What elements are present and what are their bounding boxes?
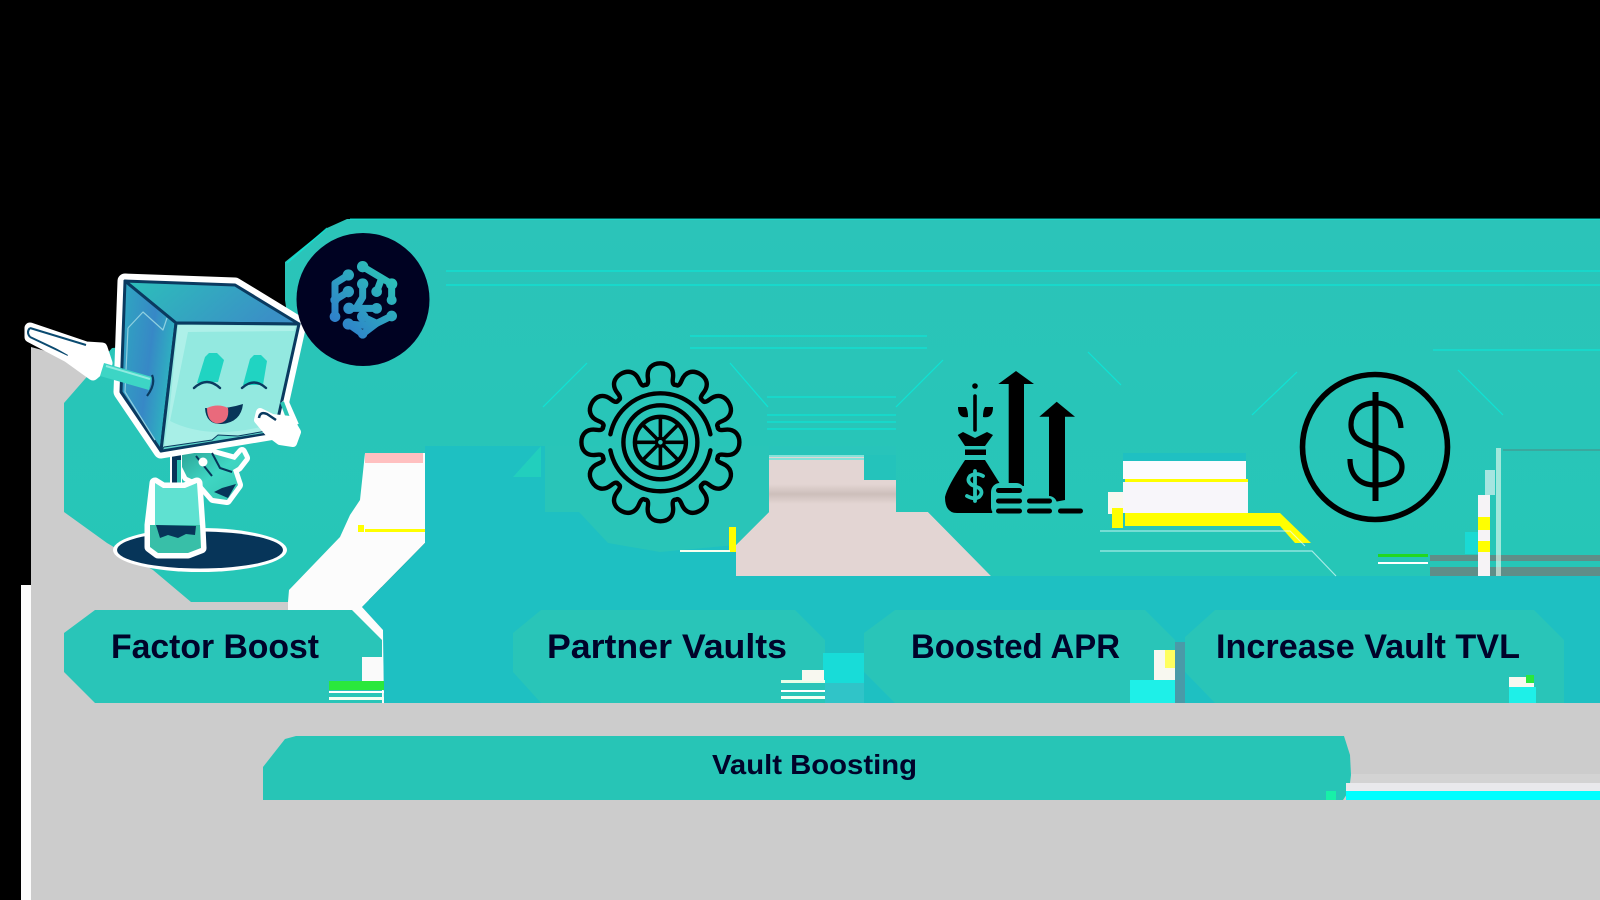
panel: factor boost mascot: [28, 281, 299, 572]
mascot shadow ellipse: [113, 528, 287, 572]
mascot pointing arm: [100, 363, 153, 396]
logo badge: [296, 233, 430, 366]
mascot right hand: [258, 400, 297, 443]
bar: Vault Boosting: [263, 736, 1600, 800]
mascot eyes: [197, 353, 267, 385]
label pill: Partner Vaults: Partner Vaults: [547, 628, 787, 666]
pill glitch detail: [781, 653, 864, 703]
label pill: Increase Vault TVL: Increase Vault TVL: [1216, 628, 1520, 666]
mascot front leg: [170, 448, 182, 488]
label pill: Factor Boost: [64, 610, 384, 703]
icon: money bag with rising arrows: [945, 371, 1083, 516]
icon: gear with wheel: [581, 363, 739, 521]
label pill: Partner Vaults: [513, 610, 864, 703]
label pill: Boosted APR: [864, 610, 1185, 703]
label pill: Increase Vault TVL: [1185, 610, 1564, 703]
icon: dollar in circle: [1302, 374, 1448, 520]
mascot cube head: [121, 281, 299, 451]
bar: Vault Boosting: Vault Boosting: [712, 749, 917, 780]
mascot mouth: [205, 404, 243, 424]
pill glitch detail: [329, 657, 384, 700]
mascot smile lines: [194, 382, 266, 388]
pill glitch detail: [1509, 675, 1536, 703]
mascot back shoe: [180, 452, 245, 500]
pill glitch detail: [1130, 642, 1185, 703]
mascot front shoe: [150, 483, 201, 553]
mascot left glove: [28, 328, 107, 375]
logo network mark: [330, 261, 397, 339]
label pill: Factor Boost: Factor Boost: [111, 628, 319, 666]
label pill: Boosted APR: Boosted APR: [911, 628, 1120, 666]
